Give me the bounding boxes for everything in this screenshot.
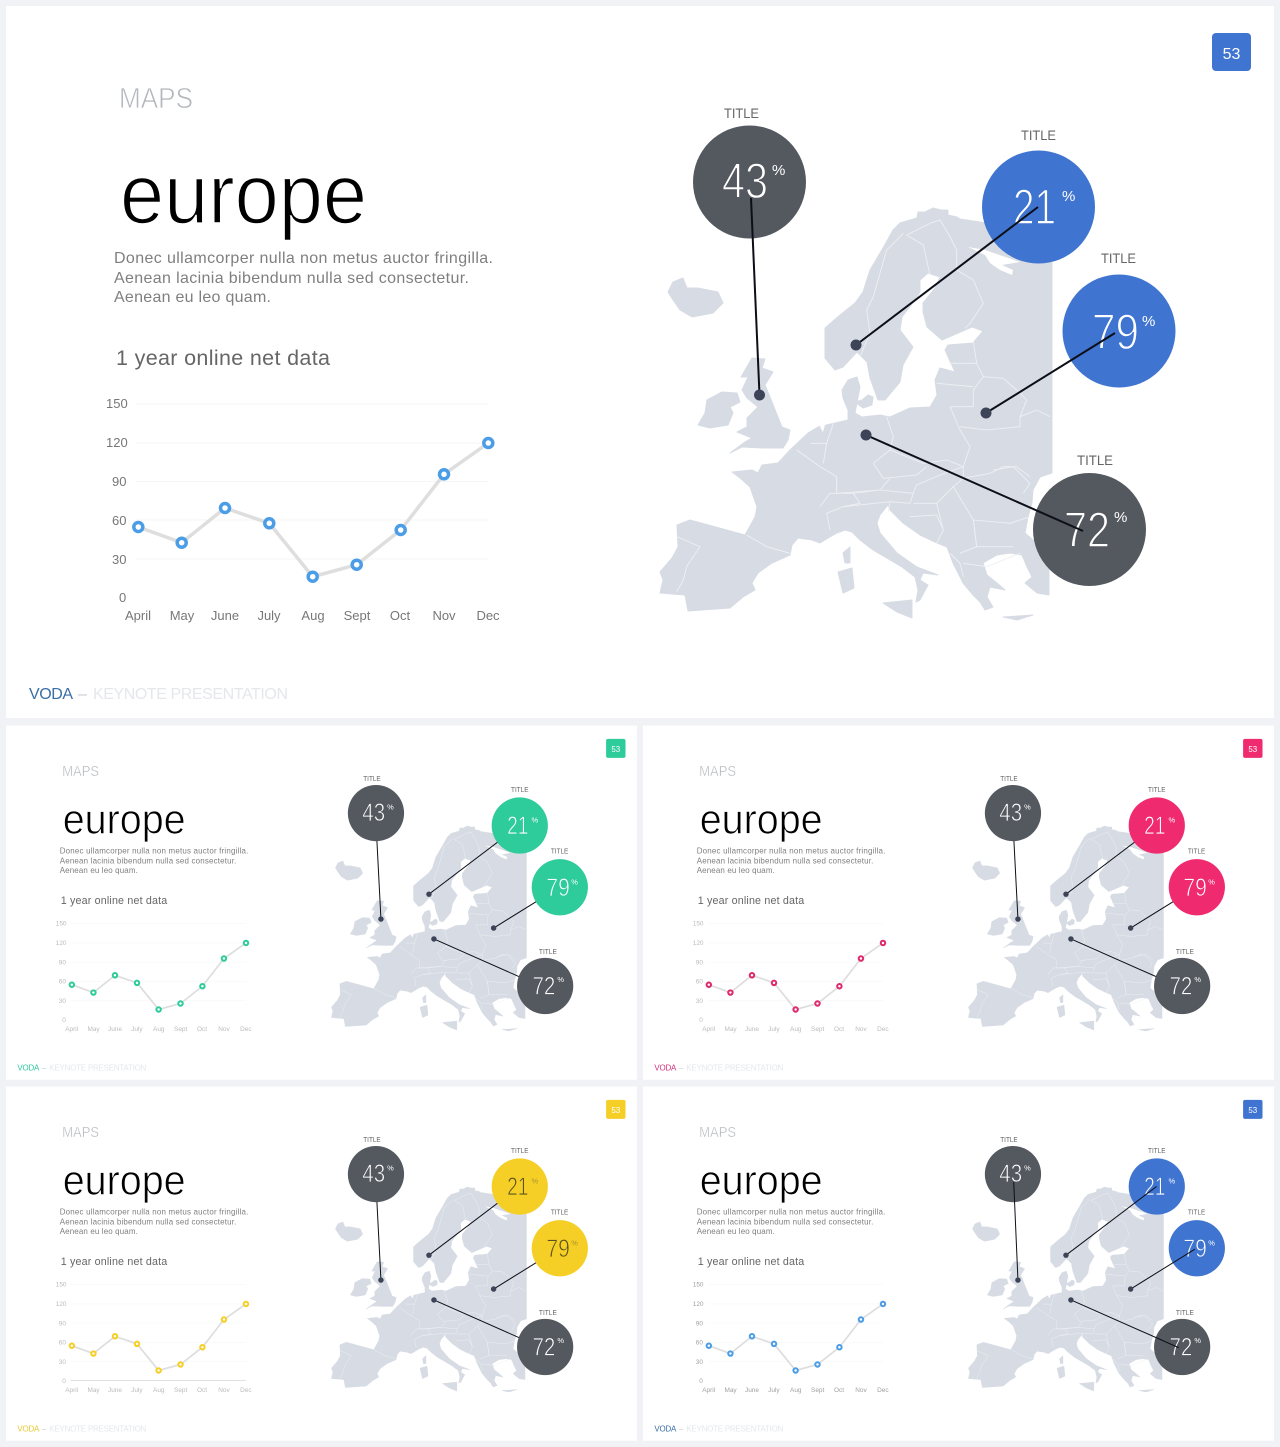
line chart: 0: [62, 1378, 66, 1385]
footer: –: [42, 1063, 47, 1072]
description text: [60, 1207, 248, 1236]
line chart: May: [87, 1026, 100, 1033]
badge: slide number: 53: [1248, 745, 1258, 754]
callout: 72 percent: TITLE: [1077, 452, 1113, 468]
footer: –: [78, 686, 87, 703]
callout: 43 percent: 43: [999, 799, 1022, 827]
line chart: April: [125, 608, 151, 623]
callout: 21 percent: %: [531, 816, 538, 825]
callout: 79 percent: [980, 250, 1176, 418]
callout: 72 percent: %: [557, 1336, 564, 1345]
line chart: 150: [56, 1282, 67, 1289]
line chart: May: [170, 608, 195, 623]
panel: main slide blue: [6, 6, 1274, 718]
callout: 43 percent: TITLE: [724, 105, 759, 121]
line chart: Nov: [855, 1026, 867, 1033]
line chart: 30: [696, 998, 703, 1005]
line chart: 120: [56, 940, 67, 947]
section label: MAPS: [62, 1125, 99, 1141]
badge: slide number: [606, 1100, 626, 1119]
description text: Donec ullamcorper nulla non metus auctor fringilla.: [60, 846, 248, 855]
line chart: June: [211, 608, 239, 623]
callout: 21 percent: TITLE: [511, 787, 529, 794]
line chart: Oct: [834, 1026, 844, 1033]
callout: 79 percent: 79: [1183, 874, 1207, 902]
line chart: June: [745, 1387, 759, 1394]
callout: 72 percent: [860, 430, 1146, 586]
callout: 21 percent: 21: [1144, 1173, 1165, 1201]
badge: slide number: 53: [611, 1106, 621, 1115]
callout: 21 percent: %: [531, 1177, 538, 1186]
line chart: Nov: [218, 1387, 230, 1394]
callout: 72 percent: %: [1194, 1336, 1201, 1345]
callout: 79 percent: TITLE: [551, 1209, 569, 1216]
footer: KEYNOTE PRESENTATION: [686, 1063, 784, 1072]
callout: 43 percent: %: [387, 803, 394, 812]
footer: VODA: [654, 1063, 677, 1072]
description text: [114, 250, 493, 306]
callout: 79 percent: %: [571, 1239, 578, 1248]
panel: small slide blue: [643, 1086, 1274, 1441]
chart heading: 1 year online net data: [61, 1256, 167, 1268]
footer: –: [679, 1063, 684, 1072]
callout: 79 percent: TITLE: [1188, 848, 1206, 855]
callout: 21 percent: [1063, 1148, 1185, 1258]
callout: 21 percent: %: [1168, 1177, 1175, 1186]
line chart: 150: [106, 396, 128, 411]
description text: Aenean eu leo quam.: [114, 289, 271, 306]
line chart: 90: [696, 1320, 703, 1327]
callout: 72 percent: TITLE: [1176, 949, 1194, 956]
callout: 72 percent: 72: [1064, 502, 1110, 558]
line chart: April: [65, 1387, 78, 1394]
line chart: 90: [112, 474, 126, 489]
callout: 79 percent: 79: [546, 1235, 570, 1263]
line chart: 0: [62, 1017, 66, 1024]
heading: europe: [63, 1156, 186, 1203]
callout: 43 percent: [348, 776, 404, 922]
map of europe: [331, 1187, 526, 1392]
line chart: 30: [59, 998, 66, 1005]
heading: europe: [63, 795, 186, 842]
line chart: Oct: [834, 1387, 844, 1394]
line chart: 120: [693, 940, 704, 947]
badge: slide number: [1212, 33, 1251, 71]
line chart: 60: [696, 1340, 703, 1347]
line chart: Dec: [240, 1026, 252, 1033]
line chart: Sept: [811, 1026, 824, 1033]
line chart: July: [768, 1026, 780, 1033]
line chart: Aug: [790, 1387, 802, 1394]
line chart: 150: [56, 921, 67, 928]
callout: 79 percent: %: [1208, 1239, 1215, 1248]
callout: 21 percent: TITLE: [511, 1148, 529, 1155]
callout: 21 percent: [426, 1148, 548, 1258]
callout: 43 percent: TITLE: [363, 1137, 381, 1144]
callout: 21 percent: 21: [1144, 812, 1165, 840]
callout: 72 percent: TITLE: [539, 949, 557, 956]
description text: Donec ullamcorper nulla non metus auctor fringilla.: [114, 250, 493, 267]
callout: 79 percent: TITLE: [1101, 250, 1136, 266]
callout: 21 percent: [1063, 787, 1185, 897]
line chart: June: [745, 1026, 759, 1033]
line chart: 90: [59, 1320, 66, 1327]
line chart: July: [131, 1026, 143, 1033]
description text: Aenean lacinia bibendum nulla sed consectetur.: [60, 1217, 236, 1226]
callout: 79 percent: %: [1142, 313, 1155, 330]
line chart: Dec: [476, 608, 500, 623]
heading: europe: [120, 147, 367, 241]
line chart: 0: [699, 1017, 703, 1024]
line chart: June: [108, 1387, 122, 1394]
callout: 21 percent: TITLE: [1148, 1148, 1166, 1155]
footer: KEYNOTE PRESENTATION: [49, 1063, 147, 1072]
line chart: Sept: [174, 1026, 187, 1033]
description text: [60, 846, 248, 875]
line chart: July: [768, 1387, 780, 1394]
description text: Donec ullamcorper nulla non metus auctor fringilla.: [697, 846, 885, 855]
footer: –: [42, 1424, 47, 1433]
description text: Aenean lacinia bibendum nulla sed consectetur.: [697, 856, 873, 865]
map of europe: [331, 826, 526, 1031]
map of europe: [660, 208, 1052, 620]
description text: Aenean eu leo quam.: [697, 1227, 775, 1236]
line chart: Dec: [240, 1387, 252, 1394]
line chart: 150: [693, 1282, 704, 1289]
callout: 21 percent: TITLE: [1021, 127, 1056, 143]
line chart: July: [257, 608, 281, 623]
callout: 21 percent: 21: [1013, 179, 1056, 235]
line chart: Oct: [390, 608, 410, 623]
callout: 43 percent: %: [772, 162, 785, 179]
line chart: Dec: [877, 1387, 889, 1394]
description text: Aenean lacinia bibendum nulla sed consectetur.: [697, 1217, 873, 1226]
callout: 21 percent: 21: [507, 1173, 528, 1201]
line chart: 120: [693, 1301, 704, 1308]
badge: slide number: 53: [1223, 46, 1240, 63]
description text: [697, 846, 885, 875]
badge: slide number: [1243, 1100, 1263, 1119]
callout: 72 percent: %: [557, 975, 564, 984]
callout: 43 percent: [985, 1137, 1041, 1283]
callout: 43 percent: TITLE: [1000, 776, 1018, 783]
callout: 43 percent: [693, 105, 806, 400]
footer: –: [679, 1424, 684, 1433]
line chart: April: [702, 1026, 715, 1033]
line chart: April: [65, 1026, 78, 1033]
line chart: Aug: [153, 1026, 165, 1033]
line chart: May: [724, 1026, 737, 1033]
description text: Aenean eu leo quam.: [60, 1227, 138, 1236]
description text: Aenean lacinia bibendum nulla sed consectetur.: [114, 270, 469, 287]
footer: KEYNOTE PRESENTATION: [93, 686, 288, 703]
callout: 43 percent: %: [387, 1164, 394, 1173]
line chart: Sept: [811, 1387, 824, 1394]
callout: 72 percent: %: [1114, 509, 1127, 526]
line chart: Nov: [855, 1387, 867, 1394]
line chart: Sept: [174, 1387, 187, 1394]
callout: 43 percent: %: [1024, 803, 1031, 812]
chart heading: 1 year online net data: [61, 895, 167, 907]
callout: 72 percent: TITLE: [539, 1310, 557, 1317]
description text: Aenean eu leo quam.: [60, 866, 138, 875]
line chart: 60: [59, 1340, 66, 1347]
line chart: May: [724, 1387, 737, 1394]
description text: Donec ullamcorper nulla non metus auctor fringilla.: [697, 1207, 885, 1216]
line chart: Sept: [344, 608, 371, 623]
callout: 72 percent: [1068, 936, 1210, 1014]
callout: 21 percent: 21: [507, 812, 528, 840]
badge: slide number: 53: [1248, 1106, 1258, 1115]
callout: 72 percent: 72: [532, 1334, 555, 1362]
line chart: 120: [56, 1301, 67, 1308]
line chart: 30: [59, 1359, 66, 1366]
footer: VODA: [654, 1424, 677, 1433]
line chart: [56, 1282, 252, 1394]
line chart: 90: [696, 959, 703, 966]
line chart: 120: [106, 435, 128, 450]
callout: 72 percent: 72: [532, 973, 555, 1001]
callout: 72 percent: [431, 936, 573, 1014]
line chart: 30: [696, 1359, 703, 1366]
line chart: 0: [119, 590, 126, 605]
map of europe: [968, 1187, 1163, 1392]
section label: MAPS: [699, 764, 736, 780]
panel: small slide green: [6, 726, 637, 1080]
heading: europe: [700, 795, 823, 842]
callout: 43 percent: 43: [999, 1160, 1022, 1188]
section label: MAPS: [119, 83, 193, 115]
line chart: [106, 396, 500, 623]
callout: 79 percent: TITLE: [551, 848, 569, 855]
description text: Aenean eu leo quam.: [697, 866, 775, 875]
line chart: Oct: [197, 1387, 207, 1394]
line chart: Aug: [790, 1026, 802, 1033]
callout: 43 percent: 43: [362, 1160, 385, 1188]
section label: MAPS: [699, 1125, 736, 1141]
chart heading: 1 year online net data: [698, 1256, 804, 1268]
badge: slide number: [606, 739, 626, 758]
line chart: 60: [112, 513, 126, 528]
chart heading: 1 year online net data: [698, 895, 804, 907]
callout: 43 percent: %: [1024, 1164, 1031, 1173]
footer: KEYNOTE PRESENTATION: [49, 1424, 147, 1433]
callout: 21 percent: [426, 787, 548, 897]
footer: VODA: [29, 686, 73, 703]
line chart: Aug: [301, 608, 325, 623]
section label: MAPS: [62, 764, 99, 780]
callout: 43 percent: TITLE: [1000, 1137, 1018, 1144]
callout: 79 percent: 79: [1183, 1235, 1207, 1263]
panel: small slide pink: [643, 726, 1274, 1080]
description text: [697, 1207, 885, 1236]
callout: 43 percent: 43: [722, 153, 768, 209]
line chart: [56, 921, 252, 1033]
line chart: 150: [693, 921, 704, 928]
line chart: May: [87, 1387, 100, 1394]
callout: 79 percent: [1128, 848, 1225, 931]
callout: 79 percent: TITLE: [1188, 1209, 1206, 1216]
callout: 79 percent: [491, 848, 588, 931]
callout: 72 percent: [431, 1297, 573, 1375]
heading: europe: [700, 1156, 823, 1203]
callout: 43 percent: [985, 776, 1041, 922]
line chart: [693, 921, 889, 1033]
callout: 79 percent: %: [571, 878, 578, 887]
badge: slide number: [1243, 739, 1263, 758]
callout: 21 percent: %: [1062, 188, 1075, 205]
callout: 21 percent: [850, 127, 1095, 350]
line chart: 0: [699, 1378, 703, 1385]
callout: 72 percent: %: [1194, 975, 1201, 984]
description text: Donec ullamcorper nulla non metus auctor fringilla.: [60, 1207, 248, 1216]
line chart: June: [108, 1026, 122, 1033]
footer: VODA: [17, 1424, 40, 1433]
callout: 79 percent: 79: [546, 874, 570, 902]
line chart: 90: [59, 959, 66, 966]
map of europe: [968, 826, 1163, 1031]
callout: 79 percent: [491, 1209, 588, 1292]
footer: KEYNOTE PRESENTATION: [686, 1424, 784, 1433]
line chart: Oct: [197, 1026, 207, 1033]
chart heading: 1 year online net data: [116, 346, 330, 370]
line chart: Nov: [432, 608, 456, 623]
line chart: July: [131, 1387, 143, 1394]
callout: 72 percent: 72: [1169, 973, 1192, 1001]
callout: 72 percent: TITLE: [1176, 1310, 1194, 1317]
line chart: [693, 1282, 889, 1394]
line chart: Aug: [153, 1387, 165, 1394]
callout: 79 percent: %: [1208, 878, 1215, 887]
callout: 43 percent: [348, 1137, 404, 1283]
line chart: Dec: [877, 1026, 889, 1033]
line chart: Nov: [218, 1026, 230, 1033]
line chart: 30: [112, 552, 126, 567]
description text: Aenean lacinia bibendum nulla sed consectetur.: [60, 856, 236, 865]
callout: 79 percent: [1128, 1209, 1225, 1292]
callout: 79 percent: 79: [1092, 304, 1139, 360]
callout: 21 percent: %: [1168, 816, 1175, 825]
callout: 72 percent: 72: [1169, 1334, 1192, 1362]
line chart: 60: [696, 979, 703, 986]
panel: small slide yellow: [6, 1086, 637, 1441]
footer: VODA: [17, 1063, 40, 1072]
badge: slide number: 53: [611, 745, 621, 754]
line chart: 60: [59, 979, 66, 986]
line chart: April: [702, 1387, 715, 1394]
callout: 72 percent: [1068, 1297, 1210, 1375]
callout: 43 percent: TITLE: [363, 776, 381, 783]
callout: 43 percent: 43: [362, 799, 385, 827]
callout: 21 percent: TITLE: [1148, 787, 1166, 794]
